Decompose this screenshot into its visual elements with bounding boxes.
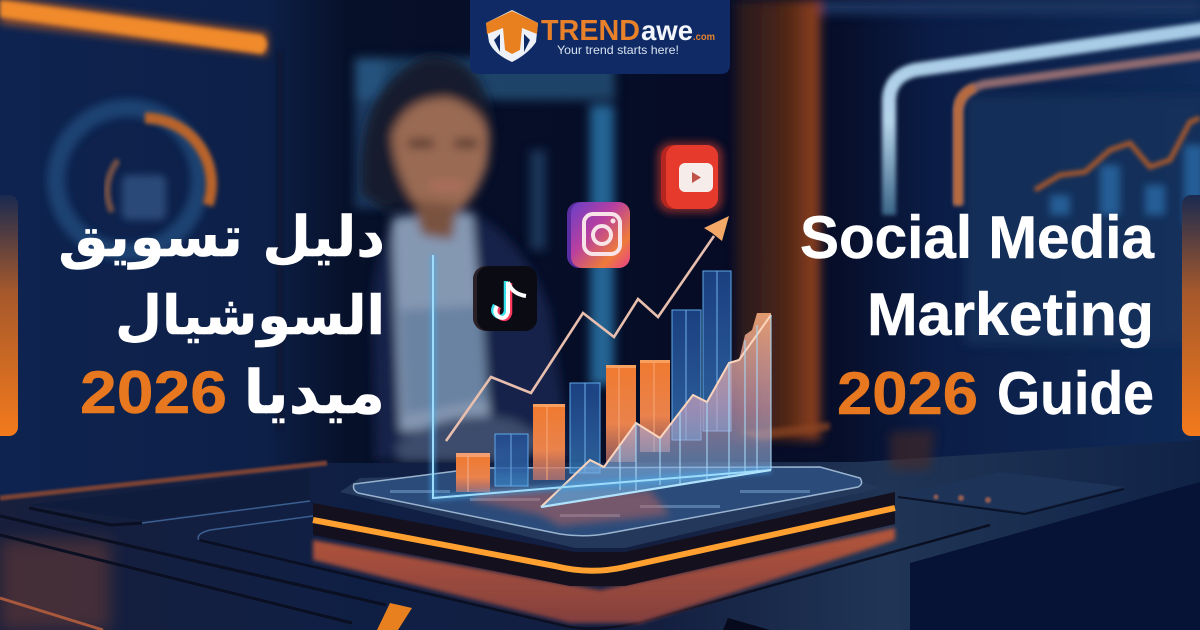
bar 6 bbox=[640, 360, 670, 452]
line: دليل تسويق: دليل تسويق bbox=[58, 205, 385, 270]
area chart bbox=[541, 313, 771, 507]
bar 2 bbox=[495, 434, 528, 486]
side accent right bbox=[1182, 195, 1200, 436]
side accent left bbox=[0, 195, 18, 436]
icon: youtube bbox=[657, 142, 723, 213]
tagline: Your trend starts here! bbox=[557, 43, 679, 57]
line: ميديا: ميديا bbox=[244, 358, 385, 428]
icon: tiktok bbox=[473, 266, 537, 331]
title: English bbox=[800, 204, 1155, 427]
line: 2026 Arabic side: 2026 bbox=[80, 359, 227, 426]
glass surface bbox=[354, 467, 862, 536]
bar 5 bbox=[606, 365, 636, 462]
desk surface bbox=[0, 422, 1200, 630]
bar 7 bbox=[672, 310, 701, 440]
icon: instagram bbox=[567, 202, 630, 268]
line: Social Media: Social Media bbox=[800, 204, 1155, 271]
bar 8 bbox=[703, 271, 731, 431]
woman (blurred figure) bbox=[361, 56, 572, 462]
platform reflection bbox=[313, 528, 895, 623]
platform tablet bbox=[313, 466, 895, 586]
bar 3 bbox=[533, 404, 565, 480]
bar chart bbox=[456, 271, 731, 492]
bar 1 bbox=[456, 453, 490, 492]
brand wordmark com: .com bbox=[693, 32, 715, 43]
icon: logo shield bbox=[486, 10, 538, 62]
left background screen bbox=[0, 0, 283, 430]
bar 4 bbox=[570, 383, 600, 473]
line: Guide: Guide bbox=[997, 360, 1154, 427]
line: 2026: 2026 bbox=[837, 360, 978, 427]
brand wordmark awe: awe bbox=[641, 15, 693, 46]
brand wordmark: TREND bbox=[541, 15, 640, 47]
platform orange glow edge bbox=[313, 508, 895, 571]
line: Marketing: Marketing bbox=[867, 281, 1154, 348]
line: السوشيال: السوشيال bbox=[115, 284, 385, 347]
title: Arabic bbox=[58, 205, 385, 428]
right background screen bbox=[889, 28, 1200, 345]
logo panel bbox=[470, 0, 730, 74]
hologram axis frame bbox=[433, 255, 771, 507]
trend arrow bbox=[446, 216, 729, 441]
